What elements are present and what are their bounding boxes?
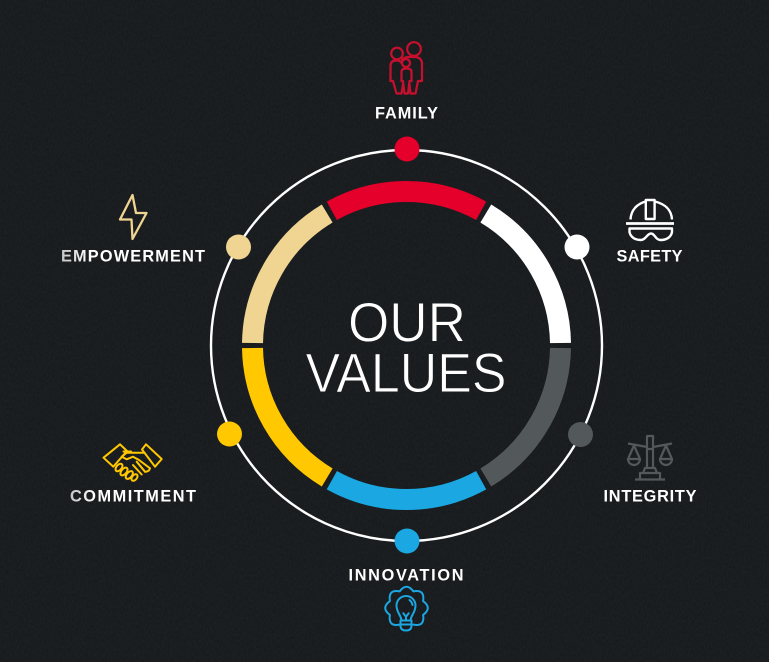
icon: innovation gear and lightbulb [385,587,428,630]
segment: safety (white) [486,214,560,343]
centre title: OUR [348,290,466,354]
icon: commitment handshake [104,444,162,482]
icon: integrity scales [628,436,672,480]
dot: commitment [217,422,242,446]
icon: empowerment lightning bolt [120,195,146,239]
dot: integrity [568,422,593,447]
handshake fingers [114,462,139,482]
outer ring [211,150,602,541]
icon: safety helmet and goggles [626,200,674,240]
label: empowerment: EMPOWERMENT [61,248,205,266]
segment: empowerment (beige) [252,214,327,343]
label: innovation: INNOVATION [348,566,464,584]
segment: commitment (yellow) [252,348,327,478]
centre title: VALUES [306,341,506,404]
label: family: FAMILY [375,104,438,122]
dot: empowerment [226,234,251,260]
dot: innovation [394,528,420,554]
icon: family [390,42,422,94]
dot: family [394,136,420,162]
label: safety: SAFETY [616,248,683,266]
centre title [306,290,506,404]
segment: innovation (blue) [332,480,481,499]
segment: family (red) [332,192,481,211]
dot: safety [564,234,590,260]
label: commitment: COMMITMENT [70,488,196,506]
label: integrity: INTEGRITY [604,488,697,506]
segment: integrity (grey) [486,348,560,478]
segmented inner ring [252,192,560,499]
